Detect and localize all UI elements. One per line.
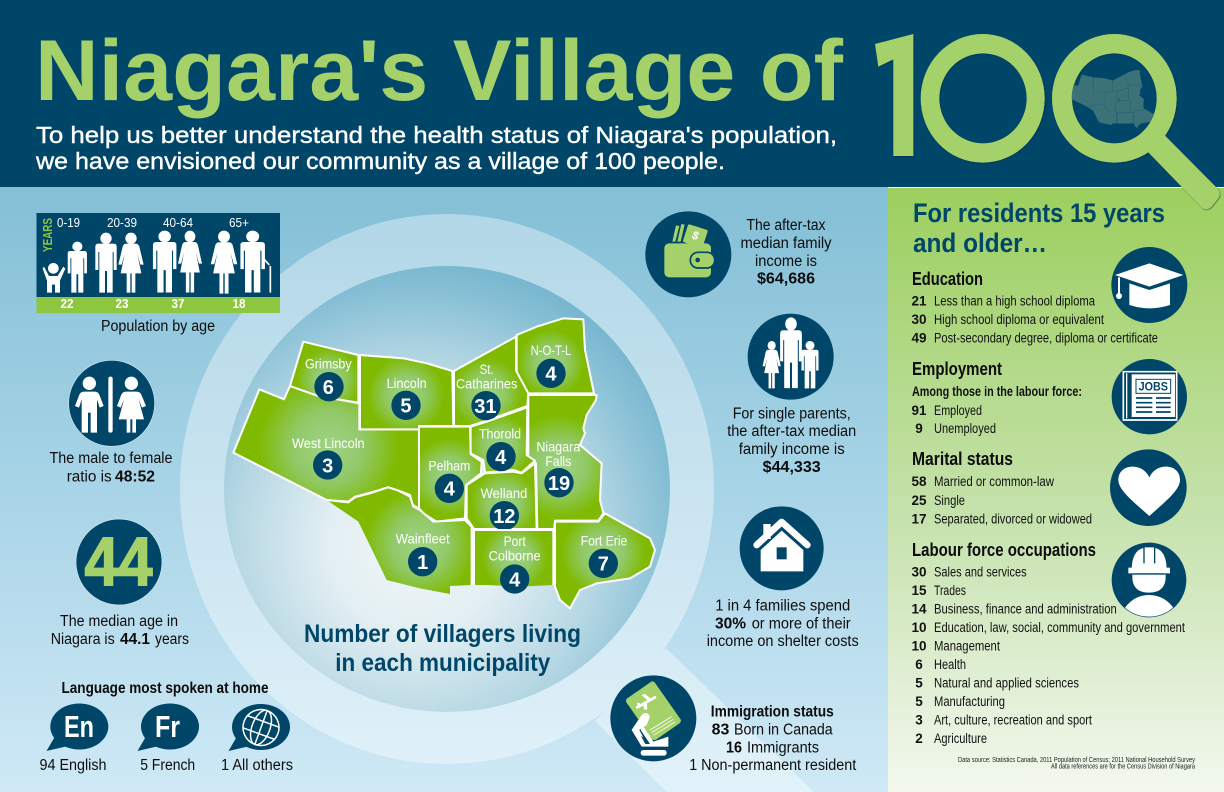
text: shelter costs bbox=[707, 598, 859, 650]
section: labour force occupations: Sales and services bbox=[934, 565, 1027, 580]
subtitle: we have envisioned our community as a village of 100 people. bbox=[35, 148, 725, 174]
years label: YEARS bbox=[40, 218, 55, 252]
section: labour force occupations: Art, culture, recreation and sport bbox=[934, 713, 1092, 728]
region: West Lincoln bbox=[233, 386, 419, 508]
region: Niagara Falls bbox=[528, 395, 603, 529]
region: Lincoln bbox=[360, 355, 453, 429]
icon: graduation cap bbox=[1111, 247, 1187, 323]
map caption bbox=[304, 620, 581, 677]
text: single parents income: $44,333 bbox=[763, 459, 821, 476]
heading: for residents 15 years and older bbox=[913, 198, 1165, 258]
section: education: High school diploma or equivalent bbox=[934, 312, 1104, 327]
text: shelter costs: income on shelter costs bbox=[707, 633, 859, 650]
region: Wainfleet: 1 bbox=[417, 552, 428, 574]
heading: language: Language most spoken at home bbox=[62, 680, 269, 697]
section: marital status: Single bbox=[934, 493, 965, 508]
text: immigration status: Immigration status bbox=[711, 704, 834, 721]
region: Welland: 12 bbox=[493, 506, 515, 528]
region: Grimsby: 6 bbox=[323, 377, 334, 399]
age labels: 40-64 bbox=[163, 215, 193, 230]
map caption: Number of villagers living bbox=[304, 620, 581, 648]
age values bbox=[60, 296, 246, 311]
region: Grimsby bbox=[290, 342, 358, 403]
panel: right green column bbox=[888, 188, 1224, 792]
text: immigration status: Immigrants bbox=[747, 739, 819, 756]
data source note bbox=[958, 757, 1195, 770]
region: West Lincoln: 3 bbox=[322, 455, 333, 477]
region: St. Catharines: 31 bbox=[474, 396, 496, 418]
section: labour force occupations: Agriculture bbox=[934, 731, 987, 746]
section: labour force occupations: Management bbox=[934, 639, 1000, 654]
icon: wallet: $ bbox=[690, 229, 701, 243]
region: Wainfleet bbox=[327, 487, 472, 594]
icon: French bubble bbox=[138, 704, 199, 751]
section: education bbox=[911, 269, 1158, 346]
text: immigration status: Born in Canada bbox=[734, 721, 833, 738]
age values: 23 bbox=[116, 296, 128, 311]
text: single parents income: family income is bbox=[739, 441, 845, 458]
icon: English bubble: En bbox=[64, 709, 94, 744]
section: labour force occupations bbox=[911, 540, 1185, 746]
region: Niagara Falls: 19 bbox=[548, 473, 570, 495]
text: median age: years bbox=[155, 631, 189, 648]
icon: wallet bbox=[645, 211, 731, 297]
magnifying glass backdrop bbox=[180, 214, 815, 792]
region: Welland bbox=[467, 463, 537, 530]
icon: small map in lens bbox=[1067, 70, 1155, 128]
text: male to female ratio bbox=[50, 450, 172, 486]
icon: male and female bbox=[69, 360, 155, 446]
region: Port Colborne: Colborne bbox=[489, 547, 541, 563]
region: Pelham: Pelham bbox=[428, 457, 470, 473]
language labels: 5 French bbox=[140, 757, 195, 774]
age values: 37 bbox=[172, 296, 184, 311]
section: employment: Unemployed bbox=[934, 421, 996, 436]
header band bbox=[0, 0, 1224, 187]
age labels: 0-19 bbox=[57, 215, 80, 230]
text: shelter costs: 1 in 4 families spend bbox=[715, 598, 850, 615]
text: median age bbox=[51, 613, 189, 648]
text: median age: Niagara is bbox=[51, 631, 115, 648]
background: left blue area bbox=[0, 187, 888, 792]
section: labour force occupations: 5 bbox=[915, 694, 923, 709]
text: immigration status bbox=[689, 704, 857, 774]
text: single parents income bbox=[727, 405, 856, 476]
section: employment: Among those in the labour force: bbox=[912, 384, 1082, 399]
icon: hard hat worker bbox=[1112, 543, 1186, 620]
age labels: 65+ bbox=[229, 215, 249, 230]
icon: single parent family bbox=[748, 314, 834, 400]
region: Pelham: 4 bbox=[444, 479, 455, 501]
section: labour force occupations: Business, finance and administration bbox=[934, 602, 1117, 617]
section: labour force occupations: 15 bbox=[911, 583, 927, 598]
caption: population by age: Population by age bbox=[101, 318, 215, 335]
region: Port Colborne bbox=[474, 530, 553, 594]
section: marital status bbox=[911, 449, 1092, 526]
region: Fort Erie: Fort Erie bbox=[581, 532, 628, 548]
section: marital status: 58 bbox=[911, 474, 927, 489]
section: labour force occupations: Manufacturing bbox=[934, 694, 1005, 709]
subtitle: To help us better understand the health status of Niagara's population, bbox=[36, 122, 837, 148]
section: labour force occupations: 10 bbox=[911, 620, 927, 635]
region: Port Colborne: Port bbox=[504, 533, 526, 549]
section: marital status: 17 bbox=[911, 511, 927, 526]
heading: for residents 15 years and older: For residents 15 years bbox=[913, 198, 1165, 228]
map caption: in each municipality bbox=[335, 649, 550, 677]
language labels bbox=[40, 757, 293, 774]
title: Niagara's Village of bbox=[35, 23, 843, 119]
section: education: 30 bbox=[911, 312, 927, 327]
section: employment: Employment bbox=[912, 359, 1002, 379]
region: West Lincoln: West Lincoln bbox=[292, 435, 365, 451]
text: immigration status: 1 Non-permanent resident bbox=[689, 757, 857, 774]
section: marital status: 25 bbox=[911, 493, 927, 508]
language labels: 94 English bbox=[40, 757, 106, 774]
region: Pelham bbox=[419, 427, 482, 522]
chart: population by age bbox=[36, 213, 280, 313]
text: median age: The median age in bbox=[60, 613, 178, 630]
map: municipalities of Niagara bbox=[233, 318, 655, 608]
text: immigration status: 83 bbox=[712, 721, 730, 738]
section: education: 21 bbox=[911, 294, 927, 309]
region: Port Colborne: 4 bbox=[509, 569, 520, 591]
text: after-tax median family income: $64,686 bbox=[757, 270, 815, 288]
text: median age: 44.1 bbox=[120, 631, 150, 648]
region: Thorold: Thorold bbox=[479, 426, 521, 442]
age labels: 20-39 bbox=[107, 215, 137, 230]
icon: heart bbox=[1110, 449, 1187, 526]
section: marital status: Separated, divorced or widowed bbox=[934, 511, 1092, 526]
section: education: Post-secondary degree, diploma or certificate bbox=[934, 331, 1158, 346]
region: Niagara Falls: Falls bbox=[545, 453, 571, 469]
region: Fort Erie: 7 bbox=[598, 554, 609, 576]
text: shelter costs: or more of their bbox=[752, 615, 851, 632]
region: St. Catharines: St. bbox=[480, 361, 494, 377]
region: Niagara-on-the-Lake: N-O-T-L bbox=[531, 342, 572, 358]
section: employment: 9 bbox=[915, 421, 923, 436]
region: St. Catharines bbox=[454, 337, 528, 426]
icon: French bubble: Fr bbox=[155, 709, 180, 744]
age values: 18 bbox=[232, 296, 246, 311]
region: Thorold: 4 bbox=[495, 447, 506, 469]
section: labour force occupations: Health bbox=[934, 657, 966, 672]
section: labour force occupations: 10 bbox=[911, 639, 927, 654]
text: after-tax median family income: median family bbox=[740, 235, 832, 252]
section: employment: 91 bbox=[911, 403, 927, 418]
region: Lincoln: 5 bbox=[400, 396, 412, 418]
section: employment bbox=[911, 359, 1082, 436]
section: marital status: Marital status bbox=[912, 449, 1013, 469]
text: male to female ratio: ratio is bbox=[67, 469, 112, 486]
text: male to female ratio: The male to female bbox=[50, 450, 172, 467]
text: immigration status: 16 bbox=[726, 739, 742, 756]
section: education: Less than a high school diploma bbox=[934, 294, 1095, 309]
icon: median age 44: 44 bbox=[84, 523, 152, 600]
region: St. Catharines: Catharines bbox=[456, 376, 517, 392]
icon: English bubble bbox=[46, 704, 108, 751]
region: Grimsby: Grimsby bbox=[305, 355, 352, 371]
icon: globe bubble bbox=[228, 704, 290, 751]
section: labour force occupations: Natural and applied sciences bbox=[934, 676, 1079, 691]
text: shelter costs: 30% bbox=[715, 615, 746, 632]
region: Welland: Welland bbox=[481, 485, 527, 501]
region: Thorold bbox=[471, 407, 535, 473]
region: Lincoln: Lincoln bbox=[387, 375, 427, 391]
section: labour force occupations: 2 bbox=[915, 731, 923, 746]
icon: house bbox=[740, 506, 824, 590]
section: labour force occupations: Labour force occupations bbox=[912, 540, 1096, 560]
subtitle bbox=[35, 122, 837, 174]
section: labour force occupations: 3 bbox=[915, 713, 923, 728]
section: employment: Employed bbox=[934, 403, 982, 418]
section: marital status: Married or common-law bbox=[934, 474, 1054, 489]
text: after-tax median family income: income is bbox=[755, 253, 817, 270]
icon: immigration passport bbox=[610, 675, 696, 761]
region: Niagara-on-the-Lake: 4 bbox=[545, 364, 557, 386]
section: education: Education bbox=[912, 269, 983, 289]
heading: for residents 15 years and older: and older… bbox=[913, 228, 1047, 258]
region: Niagara Falls: Niagara bbox=[536, 439, 581, 455]
text: after-tax median family income bbox=[740, 217, 832, 288]
text: male to female ratio: 48:52 bbox=[115, 469, 155, 486]
section: labour force occupations: Trades bbox=[934, 583, 966, 598]
text: single parents income: the after-tax median bbox=[727, 423, 856, 440]
age pictograms bbox=[43, 231, 270, 294]
section: labour force occupations: 30 bbox=[911, 565, 927, 580]
region: Wainfleet: Wainfleet bbox=[396, 531, 450, 547]
big 100 with magnifying glass bbox=[875, 34, 1220, 209]
region: Fort Erie bbox=[555, 513, 655, 608]
section: labour force occupations: 14 bbox=[911, 602, 927, 617]
section: labour force occupations: 6 bbox=[915, 657, 923, 672]
text: single parents income: For single parents, bbox=[733, 405, 851, 422]
section: education: 49 bbox=[911, 331, 927, 346]
icon: jobs newspaper bbox=[1112, 359, 1187, 434]
age values: 22 bbox=[60, 296, 74, 311]
age labels bbox=[57, 215, 249, 230]
section: labour force occupations: 5 bbox=[915, 676, 923, 691]
icon: jobs newspaper: JOBS bbox=[1139, 380, 1168, 394]
region: Niagara-on-the-Lake bbox=[517, 318, 594, 393]
text: after-tax median family income: The after-tax bbox=[746, 217, 826, 234]
language labels: 1 All others bbox=[221, 757, 293, 774]
